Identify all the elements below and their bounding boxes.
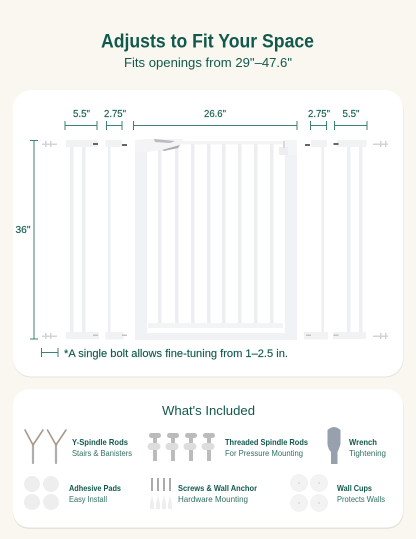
item: wrench: Wrench	[349, 437, 377, 447]
icon: screws and wall anchors	[150, 478, 172, 509]
icon: wall cups	[290, 474, 328, 512]
icon: adhesive pads	[24, 476, 59, 510]
main gate	[135, 139, 297, 340]
item: adhesive pads	[69, 483, 121, 504]
extension panel 5.5 right	[333, 140, 366, 339]
item: threaded spindle rods: Threaded Spindle Rods	[225, 437, 308, 447]
dimension: 2.75 right	[308, 108, 330, 130]
item: adhesive pads: Easy Install	[69, 494, 107, 504]
dimension: 36 height	[16, 140, 38, 339]
gate right latch	[279, 140, 297, 155]
title: Adjusts to Fit Your Space	[101, 30, 314, 52]
item: wall cups: Wall Cups	[337, 483, 372, 493]
panel: what's included	[13, 389, 404, 529]
dimension: 5.5 right	[334, 108, 367, 130]
right hardware bolts	[373, 141, 388, 339]
dimension: 5.5 left: 5.5"	[73, 108, 90, 120]
included heading: What's Included	[162, 403, 255, 418]
item: y-spindle rods: Stairs & Banisters	[72, 448, 132, 458]
icon: y-spindle rods	[25, 430, 66, 463]
item: screws and wall anchor: Hardware Mounting	[178, 494, 248, 504]
item: threaded spindle rods: For Pressure Mounting	[225, 448, 303, 458]
dimension: 2.75 left: 2.75"	[104, 108, 126, 120]
dimension: 36 height: 36"	[16, 224, 31, 236]
item: wall cups: Protects Walls	[337, 494, 385, 504]
dimension: 26.6: 26.6"	[204, 108, 226, 120]
item: wrench	[349, 437, 386, 458]
left hardware bolts	[42, 141, 57, 339]
item: screws and wall anchor	[178, 483, 258, 504]
footnote: *A single bolt allows fine-tuning from 1–2.5 in.	[64, 348, 288, 360]
dimension: 2.75 left	[104, 108, 126, 130]
dimension: bolt range	[42, 348, 58, 357]
dimension: 5.5 right: 5.5"	[342, 108, 360, 120]
extension panel 5.5 left	[66, 140, 99, 339]
gate latch handle	[135, 139, 183, 152]
item: threaded spindle rods	[225, 437, 308, 458]
extension panel 2.75 right	[304, 140, 328, 340]
subtitle: Fits openings from 29"–47.6"	[124, 56, 292, 70]
item: y-spindle rods	[72, 437, 132, 458]
item: adhesive pads: Adhesive Pads	[69, 483, 121, 493]
dimension: 2.75 right: 2.75"	[308, 108, 330, 120]
icon: threaded spindle rods	[148, 433, 215, 461]
item: wall cups	[337, 483, 385, 504]
dimension: 5.5 left	[65, 108, 97, 130]
item: y-spindle rods: Y-Spindle Rods	[72, 437, 128, 447]
item: screws and wall anchor: Screws & Wall Anchor	[178, 483, 258, 493]
panel: gate dimensions	[13, 90, 404, 378]
extension panel 2.75 left	[106, 140, 127, 340]
dimension: 26.6	[134, 108, 297, 130]
item: wrench: Tightening	[349, 448, 386, 458]
icon: wrench	[328, 427, 340, 464]
